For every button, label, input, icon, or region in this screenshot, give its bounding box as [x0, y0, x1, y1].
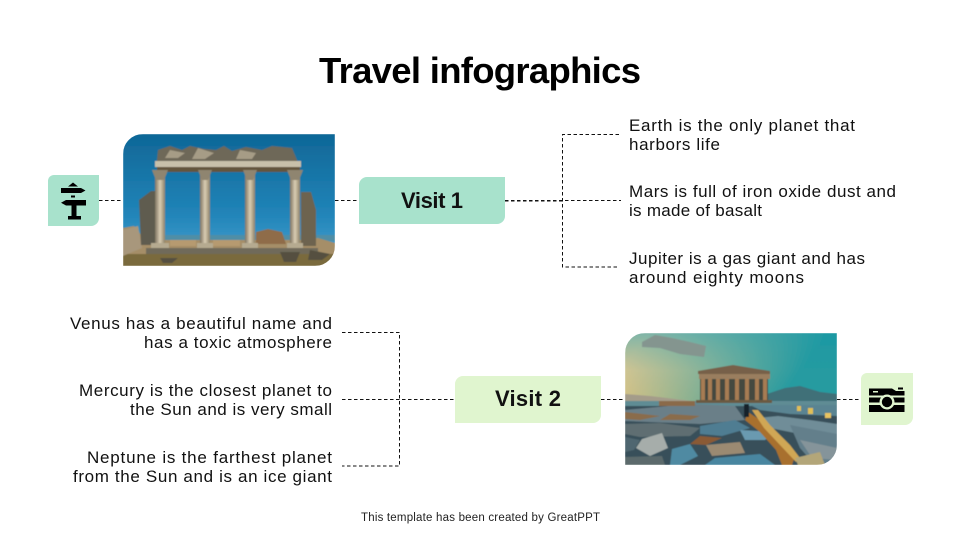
- footer note: This template has been created by GreatPPT: [361, 512, 600, 524]
- text: visit 1 facts: around eighty moons: [629, 268, 804, 287]
- icon: signpost: [48, 175, 99, 226]
- text: visit 2 facts: the Sun and is very small: [130, 400, 332, 419]
- title: Travel infographics: [319, 50, 641, 91]
- text: visit 1 facts: Mars is full of iron oxide dust and: [629, 182, 896, 201]
- icon: camera: [861, 373, 913, 425]
- text: visit 2 facts: Mercury is the closest planet to: [79, 381, 332, 400]
- label: visit 2: Visit 2: [495, 386, 561, 411]
- text: visit 1 facts: is made of basalt: [629, 201, 762, 220]
- photo: parthenon: [625, 333, 837, 465]
- photo: ancient columns: [123, 134, 335, 266]
- text: visit 2 facts: Venus has a beautiful name and: [70, 314, 332, 333]
- text: visit 1 facts: Jupiter is a gas giant and has: [629, 249, 865, 268]
- text: visit 1 facts: harbors life: [629, 135, 720, 154]
- connectors: visit 2: [342, 332, 861, 466]
- label: visit 1: Visit 1: [401, 188, 463, 213]
- label: visit 2: [455, 376, 601, 423]
- text: visit 2 facts: [70, 314, 332, 486]
- text: visit 2 facts: from the Sun and is an ice giant: [73, 467, 332, 486]
- connectors: visit 1: [99, 134, 621, 267]
- text: visit 1 facts: [629, 116, 896, 287]
- text: visit 2 facts: has a toxic atmosphere: [144, 333, 332, 352]
- label: visit 1: [359, 177, 505, 224]
- text: visit 2 facts: Neptune is the farthest planet: [87, 448, 332, 467]
- text: visit 1 facts: Earth is the only planet that: [629, 116, 855, 135]
